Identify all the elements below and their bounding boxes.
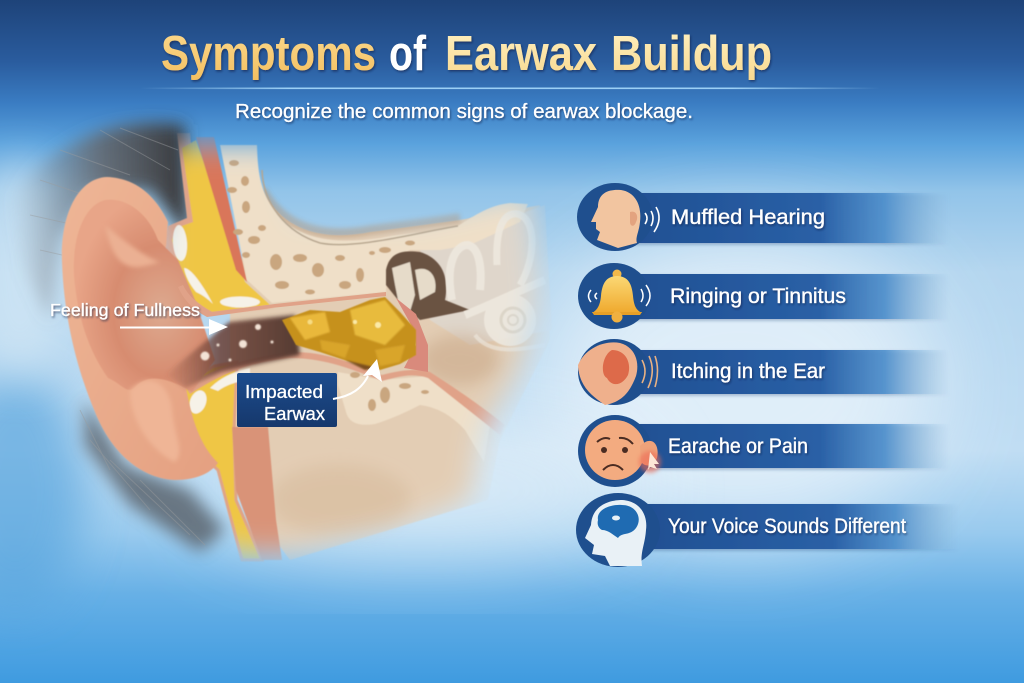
- inner ear: [450, 214, 545, 349]
- icon: head with sound waves: [591, 190, 659, 248]
- faded tissue section: [164, 133, 552, 560]
- symptom: ringing or tinnitus: Ringing or Tinnitus: [670, 285, 846, 308]
- title: of: [389, 27, 427, 81]
- label: feeling of fullness: [50, 300, 228, 335]
- symptom: earache or pain: [578, 415, 950, 487]
- symptom: muffled hearing: [577, 183, 950, 251]
- title: [161, 27, 772, 81]
- pinna: [62, 177, 218, 480]
- icon: ear: [578, 342, 658, 405]
- earwax blockage: [282, 297, 416, 370]
- pale tan tissue backdrop: [230, 190, 552, 560]
- symptom: your voice sounds different: [576, 493, 960, 567]
- symptom: ringing or tinnitus: [578, 263, 950, 329]
- icon: head with brain: [585, 500, 646, 566]
- icon: sad face with ear pain: [585, 420, 661, 480]
- lower canal wall and bone: [186, 352, 505, 462]
- upper canal wall overlap: [178, 285, 386, 317]
- upper tissue: fat, muscle: [164, 133, 275, 316]
- lower tissue: fat and muscle: [183, 362, 282, 560]
- label: impacted earwax: [237, 359, 382, 427]
- symptom: itching in the ear: [578, 339, 950, 405]
- symptom: earache or pain: Earache or Pain: [668, 435, 808, 458]
- title: Buildup: [611, 27, 772, 81]
- symptom: muffled hearing: Muffled Hearing: [671, 206, 825, 229]
- ear cross-section illustration: [10, 123, 552, 560]
- subtitle: Recognize the common signs of earwax blockage.: [235, 101, 693, 123]
- hair: [10, 123, 225, 552]
- bone: [220, 145, 528, 303]
- label: feeling of fullness: Feeling of Fullness: [50, 300, 200, 320]
- label: impacted earwax: Impacted: [245, 382, 323, 402]
- icon: ringing bell: [588, 270, 650, 322]
- title: Symptoms: [161, 27, 376, 81]
- title: Earwax: [445, 27, 597, 81]
- eardrum: [396, 298, 428, 372]
- debris in ear canal: [165, 315, 300, 388]
- ossicles and middle ear: [386, 251, 470, 320]
- label: impacted earwax: Earwax: [264, 404, 325, 424]
- symptom: your voice sounds different: Your Voice Sounds Different: [668, 515, 906, 538]
- symptom: itching in the ear: Itching in the Ear: [671, 360, 825, 383]
